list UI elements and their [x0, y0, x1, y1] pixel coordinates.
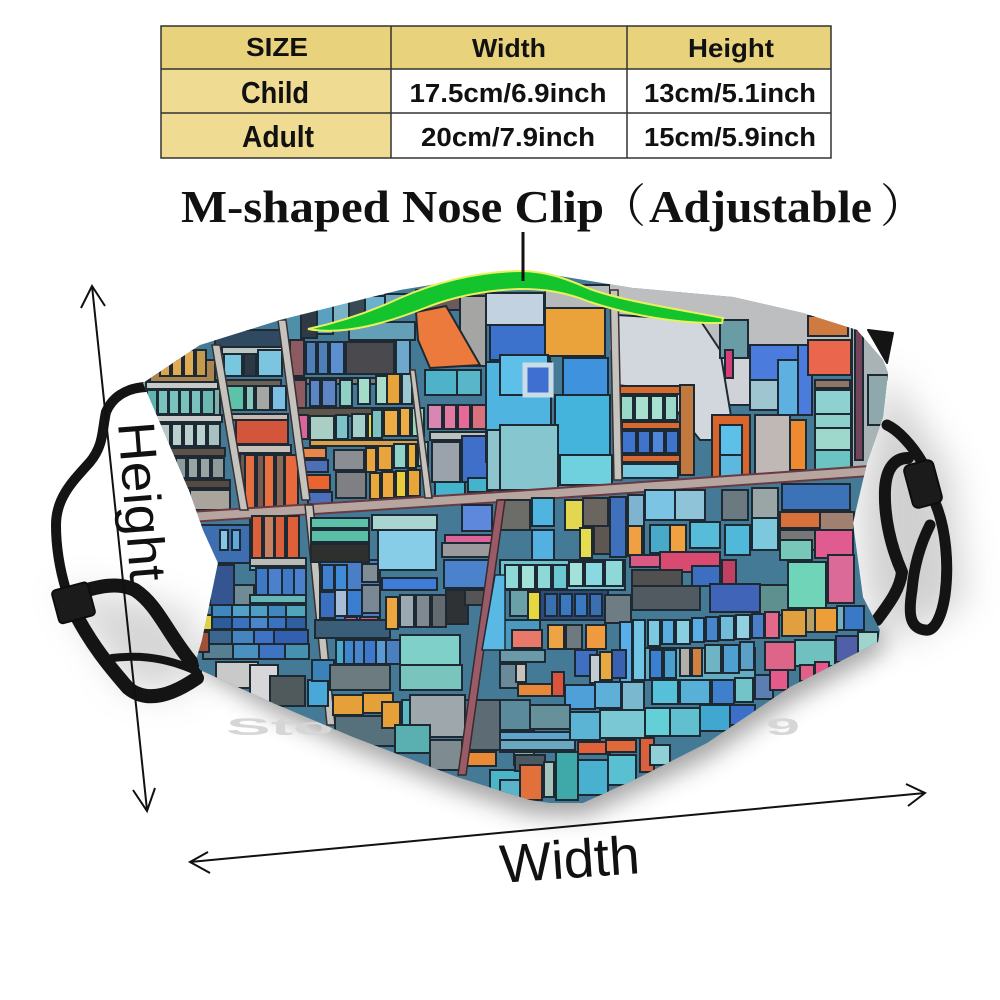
- maroon diagonal road: [458, 500, 505, 775]
- size table: SIZE: [246, 32, 308, 62]
- width label: Width: [498, 825, 642, 895]
- size table: 13cm/5.1inch: [644, 80, 816, 108]
- nose clip heading: （: [600, 181, 646, 232]
- nose clip heading: Adjustable: [649, 181, 872, 232]
- size table: 17.5cm/6.9inch: [410, 80, 606, 108]
- size table: Width: [472, 33, 546, 63]
- size table: Height: [688, 33, 774, 63]
- size table: 20cm/7.9inch: [421, 124, 595, 152]
- left ear strap: [51, 387, 198, 696]
- right side shadow: [860, 370, 965, 640]
- size table: Child: [241, 75, 309, 110]
- height label: Height: [106, 419, 176, 584]
- width arrow: [190, 784, 925, 873]
- central upper blocks: [486, 285, 612, 490]
- watermark: Sto: [226, 714, 334, 741]
- vertical roads: [212, 290, 622, 725]
- right ear strap: [868, 330, 947, 630]
- size table: Adult: [242, 119, 314, 154]
- main horizontal road: [190, 466, 870, 522]
- upper left blocks: [140, 306, 492, 510]
- watermark digit: 9: [766, 714, 800, 741]
- lower left blocks: [197, 505, 534, 792]
- upper right blocks: [610, 280, 890, 480]
- nose clip heading: M-shaped Nose Clip: [181, 181, 604, 232]
- central and lower right blocks: [500, 484, 878, 800]
- nose clip pointer line: [522, 232, 524, 281]
- height arrow: [81, 286, 155, 811]
- light blue wedge: [482, 575, 505, 650]
- left strap shadow: [60, 590, 200, 690]
- mask shadow: [198, 620, 885, 816]
- printed mask: [130, 260, 900, 810]
- nose clip heading: ）: [880, 181, 926, 232]
- top edge cells: [215, 290, 486, 366]
- size table: 15cm/5.9inch: [644, 124, 816, 152]
- mask base colour: [130, 260, 900, 810]
- nose clip heading: [181, 181, 926, 232]
- size table: [161, 26, 831, 158]
- nose clip green band: [308, 271, 723, 331]
